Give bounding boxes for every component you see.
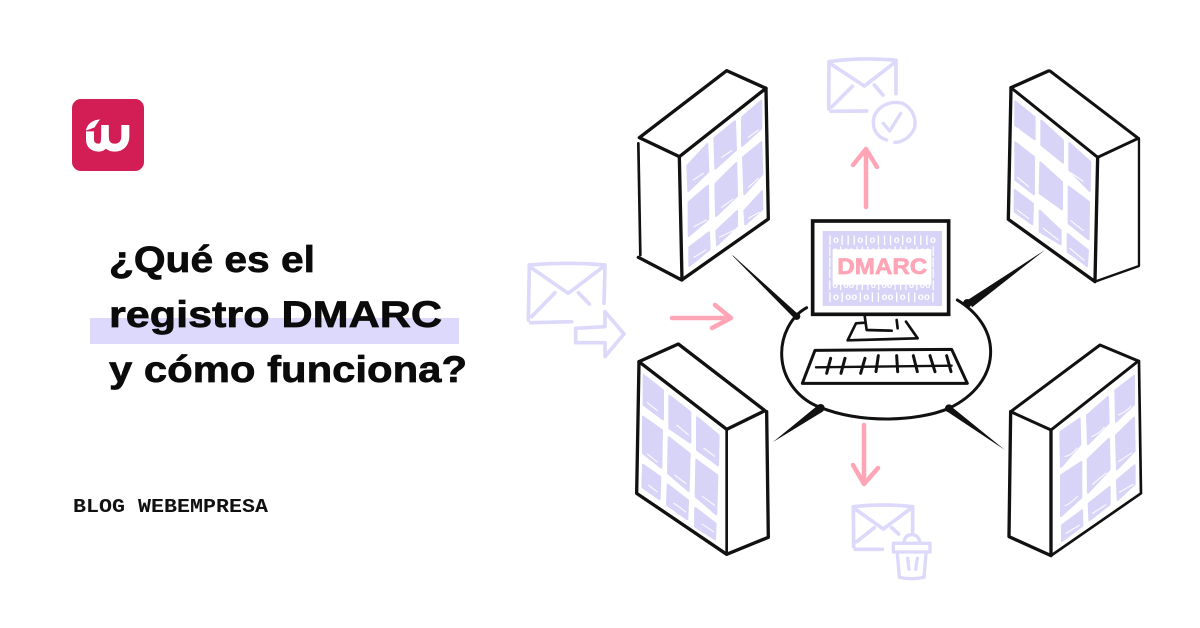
binary code (827, 235, 936, 303)
title: registro DMARC (109, 294, 442, 335)
arrow: down to rejected email (853, 425, 878, 484)
binary code: |o|oo|||o|oo|||o|oo| (827, 280, 936, 291)
server: bottom left (637, 344, 768, 554)
monitor (813, 221, 949, 314)
monitor stand (848, 316, 918, 340)
binary code: |o|||o|o|||o|o|||o| (827, 257, 936, 268)
central workstation (732, 221, 1045, 450)
server: bottom right (1009, 345, 1141, 556)
title: ¿Qué es el (109, 239, 315, 280)
arrow: up to accepted email (853, 149, 877, 207)
highlight band behind title (90, 318, 459, 344)
server: top left (638, 71, 768, 280)
binary code: |o|oo|||o|oo|||o|oo| (827, 268, 936, 279)
arrow: incoming email (672, 305, 731, 328)
title: y cómo funciona? (109, 349, 467, 390)
binary code: |o|||o|o|||o|o|||o (827, 235, 936, 246)
logo: Webempresa (72, 99, 144, 171)
binary code: |o|oo|o||oo|o||oo| (827, 292, 936, 303)
oval base (782, 300, 991, 419)
server: top right (1008, 71, 1139, 282)
icon: rejected email with trash (853, 505, 930, 579)
DMARC label: DMARC (837, 254, 927, 279)
keyboard (802, 349, 967, 383)
binary code: |o|oo|||o|oo|||o|oo| (827, 246, 936, 257)
brand label: BLOG WEBEMPRESA (73, 496, 269, 518)
icon: incoming email with arrow (528, 263, 624, 357)
connectors (732, 250, 1045, 450)
icon: accepted email with check (829, 59, 915, 142)
title (109, 239, 467, 390)
